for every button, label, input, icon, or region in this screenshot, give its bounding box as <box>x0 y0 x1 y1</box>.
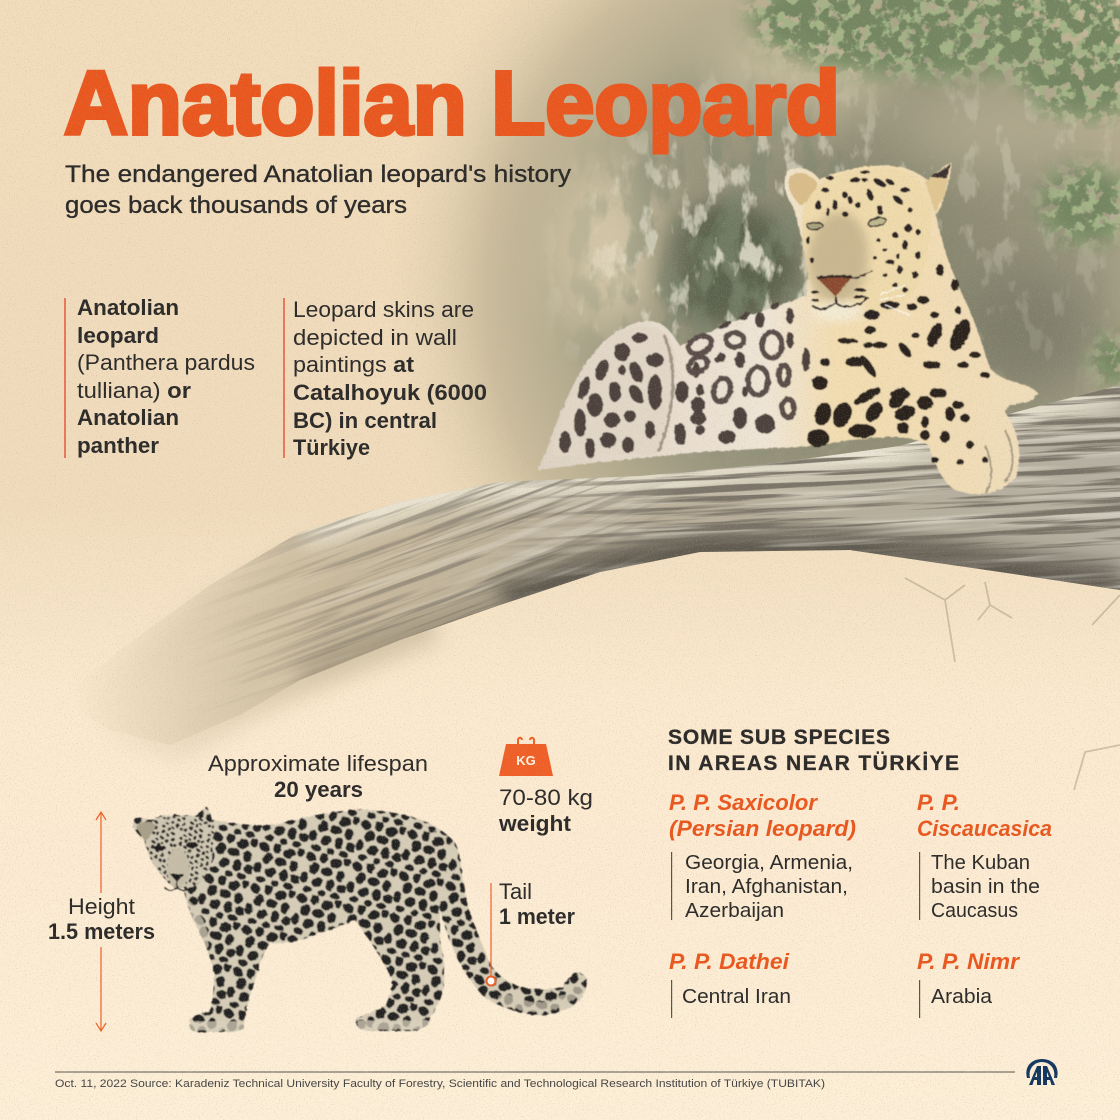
sub species: Ciscaucasica: basin in the <box>931 876 1040 898</box>
text block: Catalhoyuk wall paintings: Catalhoyuk (6000 <box>293 380 487 405</box>
standing leopard <box>125 800 595 1040</box>
ear <box>136 822 156 842</box>
sub species: Saxicolor <box>669 790 856 922</box>
text block: Catalhoyuk wall paintings: Türkiye <box>293 435 370 460</box>
misty forest backdrop <box>424 0 1120 488</box>
tail label with pointer: 1 meter <box>499 904 575 929</box>
subtitle: The endangered Anatolian leopard's history <box>65 161 571 188</box>
tail label with pointer: Tail <box>499 879 532 904</box>
subtitle: goes back thousands of years <box>65 192 407 219</box>
heading: sub species: SOME SUB SPECIES <box>668 726 890 749</box>
sub species: Saxicolor: Azerbaijan <box>685 900 784 922</box>
text block: Catalhoyuk wall paintings: paintings at <box>293 352 415 377</box>
weight label <box>498 785 593 836</box>
icon: AA logo <box>1026 1059 1058 1085</box>
height label with arrow: Height <box>68 894 135 919</box>
sub species: Ciscaucasica <box>917 790 1052 922</box>
text block: Anatolian leopard name: tulliana) or <box>77 378 191 403</box>
throat and pale underside <box>188 900 210 950</box>
sub species: Nimr: P. P. Nimr <box>917 949 1020 974</box>
text block: Catalhoyuk wall paintings: Leopard skins are <box>293 297 474 322</box>
lifespan label: 20 years <box>274 777 363 802</box>
source line: Oct. 11, 2022 Source: Karadeniz Technical University Faculty of Forestry, Scientific and Technological Research Institution of Türkiye (TUBITAK) <box>55 1078 825 1090</box>
flank and haunch spots <box>559 301 810 458</box>
text block: Anatolian leopard name: Anatolian <box>77 295 179 320</box>
sub species: Saxicolor: (Persian leopard) <box>669 816 856 841</box>
text block: Anatolian leopard name: panther <box>77 433 159 458</box>
weight label: weight <box>498 811 572 836</box>
height label with arrow: 1.5 meters <box>48 919 155 944</box>
sub species: Dathei: Central Iran <box>682 986 791 1008</box>
face details <box>154 842 198 890</box>
head <box>802 168 932 318</box>
text block: Catalhoyuk wall paintings <box>283 297 487 460</box>
reclining leopard <box>538 163 1038 494</box>
sub species: Saxicolor: P. P. Saxicolor <box>669 790 818 815</box>
lifespan label: Approximate lifespan <box>208 751 428 776</box>
body <box>538 163 1038 494</box>
sub species: Dathei: P. P. Dathei <box>669 949 790 974</box>
sub species: Nimr <box>917 949 1020 1018</box>
tail tip fur <box>500 985 582 1007</box>
twigs under the branch <box>905 578 1120 790</box>
height label with arrow <box>48 812 155 1031</box>
text block: Catalhoyuk wall paintings: BC) in central <box>293 408 437 433</box>
weight label: 70-80 kg <box>499 785 593 810</box>
haunch <box>552 326 675 455</box>
paws <box>190 1025 440 1026</box>
rosettes <box>686 332 794 417</box>
text block: Anatolian leopard name: Anatolian <box>77 405 179 430</box>
head spots <box>806 170 921 320</box>
tree branch <box>100 385 1120 757</box>
head with fine spots <box>140 816 215 890</box>
icon: KG weight <box>499 738 553 776</box>
text block: Anatolian leopard name: (Panthera pardus <box>77 350 255 375</box>
subtitle <box>65 161 571 219</box>
sub species: Dathei <box>669 949 791 1018</box>
toes <box>985 430 1012 493</box>
heading: sub species <box>668 726 959 775</box>
lifespan label <box>208 751 428 802</box>
heading: sub species: IN AREAS NEAR TÜRKİYE <box>668 752 959 775</box>
sub species: Saxicolor: Georgia, Armenia, <box>685 852 853 874</box>
foliage: top right tree <box>730 0 1120 390</box>
sub species: Ciscaucasica: Ciscaucasica <box>917 816 1052 841</box>
icon: KG weight: KG <box>516 753 536 768</box>
text block: Catalhoyuk wall paintings: depicted in wall <box>293 325 457 350</box>
sub species: Ciscaucasica: Caucasus <box>931 900 1018 922</box>
title: Anatolian Leopard <box>64 54 840 154</box>
sub species: Ciscaucasica: P. P. <box>917 790 960 815</box>
text block: Anatolian leopard name <box>64 295 255 458</box>
text block: Anatolian leopard name: leopard <box>77 323 159 348</box>
sub species: Saxicolor: Iran, Afghanistan, <box>685 876 848 898</box>
foreleg and chest spots <box>807 264 990 465</box>
eyes and nose <box>807 216 910 315</box>
tail label with pointer <box>486 879 575 986</box>
sub species: Nimr: Arabia <box>931 986 993 1008</box>
sub species: Ciscaucasica: The Kuban <box>931 852 1030 874</box>
